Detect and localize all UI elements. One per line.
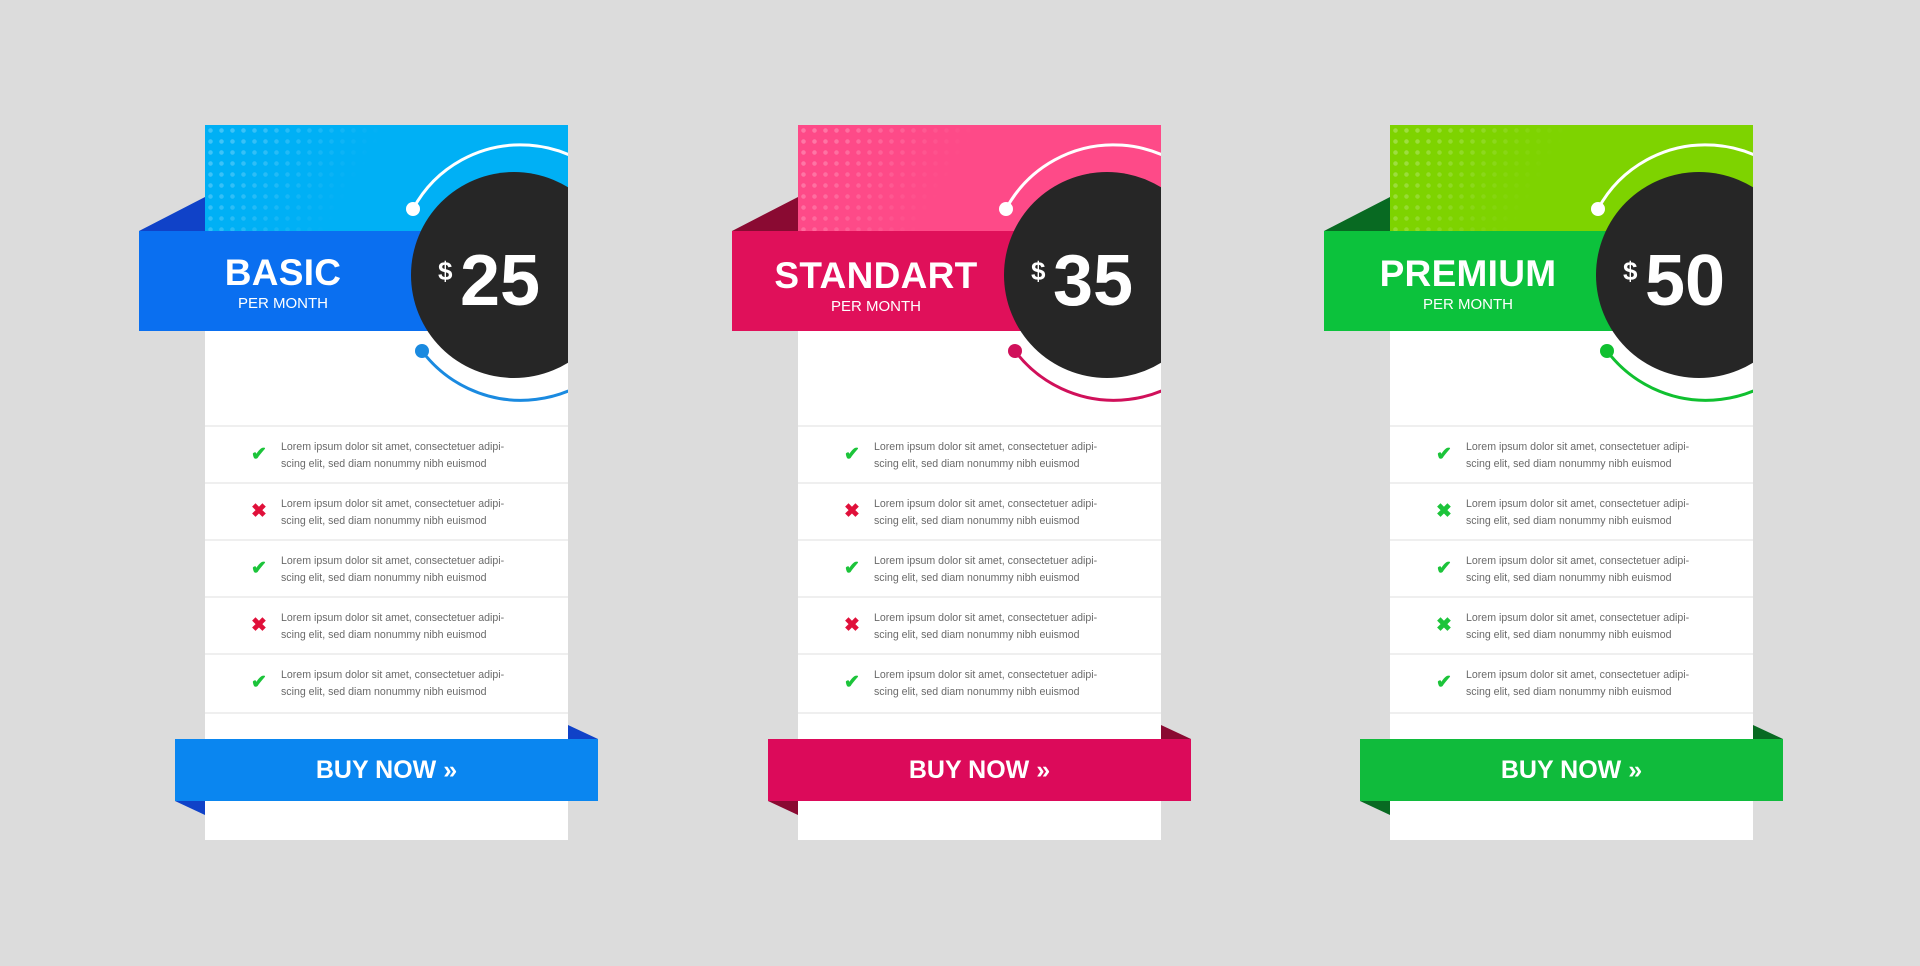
feature list: scing elit, sed diam nonummy nibh euismod <box>874 515 1080 527</box>
feature list: scing elit, sed diam nonummy nibh euismod <box>1466 458 1672 470</box>
price circle <box>1591 143 1753 402</box>
feature list: scing elit, sed diam nonummy nibh euismod <box>281 458 487 470</box>
feature list: scing elit, sed diam nonummy nibh euismod <box>281 629 487 641</box>
feature list: scing elit, sed diam nonummy nibh euismod <box>281 686 487 698</box>
feature list: ✔ <box>1436 558 1452 579</box>
feature list: ✔ <box>844 672 860 693</box>
feature list: scing elit, sed diam nonummy nibh euismod <box>281 572 487 584</box>
price circle <box>406 143 568 402</box>
feature list: ✔ <box>844 558 860 579</box>
button: buy now: BUY NOW » <box>316 756 457 784</box>
feature list: Lorem ipsum dolor sit amet, consectetuer adipi- <box>874 612 1097 624</box>
panel: basic plan card <box>205 125 568 840</box>
feature list: scing elit, sed diam nonummy nibh euismod <box>1466 629 1672 641</box>
feature list: scing elit, sed diam nonummy nibh euismod <box>874 686 1080 698</box>
title: STANDART: STANDART <box>774 255 978 296</box>
feature list: Lorem ipsum dolor sit amet, consectetuer adipi- <box>281 498 504 510</box>
title: PREMIUM <box>1380 253 1556 313</box>
feature list: ✔ <box>844 444 860 465</box>
price circle <box>999 143 1161 402</box>
feature list <box>798 425 1161 714</box>
feature list: scing elit, sed diam nonummy nibh euismod <box>281 515 487 527</box>
button folds <box>1161 725 1191 739</box>
feature list: Lorem ipsum dolor sit amet, consectetuer adipi- <box>281 612 504 624</box>
title: PREMIUM: PER MONTH <box>1423 296 1513 313</box>
feature list: ✔ <box>1436 672 1452 693</box>
price circle: 25 <box>460 241 540 321</box>
feature list: Lorem ipsum dolor sit amet, consectetuer adipi- <box>1466 498 1689 510</box>
feature list: scing elit, sed diam nonummy nibh euismod <box>874 572 1080 584</box>
ribbon fold <box>1324 197 1390 231</box>
price circle: $ <box>1031 256 1046 286</box>
header top area <box>205 125 568 231</box>
button: buy now <box>175 739 598 801</box>
title band <box>732 231 1161 331</box>
title: STANDART <box>774 255 978 315</box>
feature list: Lorem ipsum dolor sit amet, consectetuer adipi- <box>1466 612 1689 624</box>
feature list: Lorem ipsum dolor sit amet, consectetuer adipi- <box>281 555 504 567</box>
feature list: scing elit, sed diam nonummy nibh euismod <box>874 458 1080 470</box>
title: PREMIUM: PREMIUM <box>1380 253 1556 294</box>
title band <box>139 231 568 331</box>
feature list: ✔ <box>1436 444 1452 465</box>
feature list: Lorem ipsum dolor sit amet, consectetuer adipi- <box>874 669 1097 681</box>
title: BASIC: PER MONTH <box>238 295 328 312</box>
button: buy now: BUY NOW » <box>1501 756 1642 784</box>
price circle: 50 <box>1645 241 1725 321</box>
feature list: scing elit, sed diam nonummy nibh euismod <box>1466 515 1672 527</box>
header top area <box>798 125 1161 231</box>
feature list: scing elit, sed diam nonummy nibh euismod <box>1466 686 1672 698</box>
feature list: Lorem ipsum dolor sit amet, consectetuer adipi- <box>281 441 504 453</box>
price circle: $ <box>438 256 453 286</box>
feature list: scing elit, sed diam nonummy nibh euismod <box>874 629 1080 641</box>
button: buy now <box>1360 739 1783 801</box>
feature list: ✖ <box>1436 615 1452 636</box>
panel: standart plan card <box>798 125 1161 840</box>
feature list: ✖ <box>844 615 860 636</box>
price circle: 35 <box>1053 241 1133 321</box>
feature list: ✖ <box>251 615 267 636</box>
feature list: ✖ <box>844 501 860 522</box>
button folds <box>1753 725 1783 739</box>
ribbon fold <box>139 197 205 231</box>
feature list <box>1390 425 1753 714</box>
feature list: ✖ <box>1436 501 1452 522</box>
panel: premium plan card <box>1390 125 1753 840</box>
feature list: ✔ <box>251 672 267 693</box>
title: BASIC: BASIC <box>225 252 341 293</box>
button folds <box>568 725 598 739</box>
feature list: Lorem ipsum dolor sit amet, consectetuer adipi- <box>281 669 504 681</box>
title: STANDART: PER MONTH <box>831 298 921 315</box>
price circle: $ <box>1623 256 1638 286</box>
feature list: Lorem ipsum dolor sit amet, consectetuer adipi- <box>874 498 1097 510</box>
title: BASIC <box>225 252 341 312</box>
feature list: ✔ <box>251 558 267 579</box>
feature list: Lorem ipsum dolor sit amet, consectetuer adipi- <box>1466 555 1689 567</box>
feature list <box>205 425 568 714</box>
feature list: scing elit, sed diam nonummy nibh euismod <box>1466 572 1672 584</box>
feature list: Lorem ipsum dolor sit amet, consectetuer adipi- <box>874 441 1097 453</box>
button: buy now <box>768 739 1191 801</box>
ribbon fold <box>732 197 798 231</box>
feature list: Lorem ipsum dolor sit amet, consectetuer adipi- <box>1466 441 1689 453</box>
header top area <box>1390 125 1753 231</box>
feature list: ✔ <box>251 444 267 465</box>
feature list: ✖ <box>251 501 267 522</box>
title band <box>1324 231 1753 331</box>
feature list: Lorem ipsum dolor sit amet, consectetuer adipi- <box>874 555 1097 567</box>
feature list: Lorem ipsum dolor sit amet, consectetuer adipi- <box>1466 669 1689 681</box>
button: buy now: BUY NOW » <box>909 756 1050 784</box>
